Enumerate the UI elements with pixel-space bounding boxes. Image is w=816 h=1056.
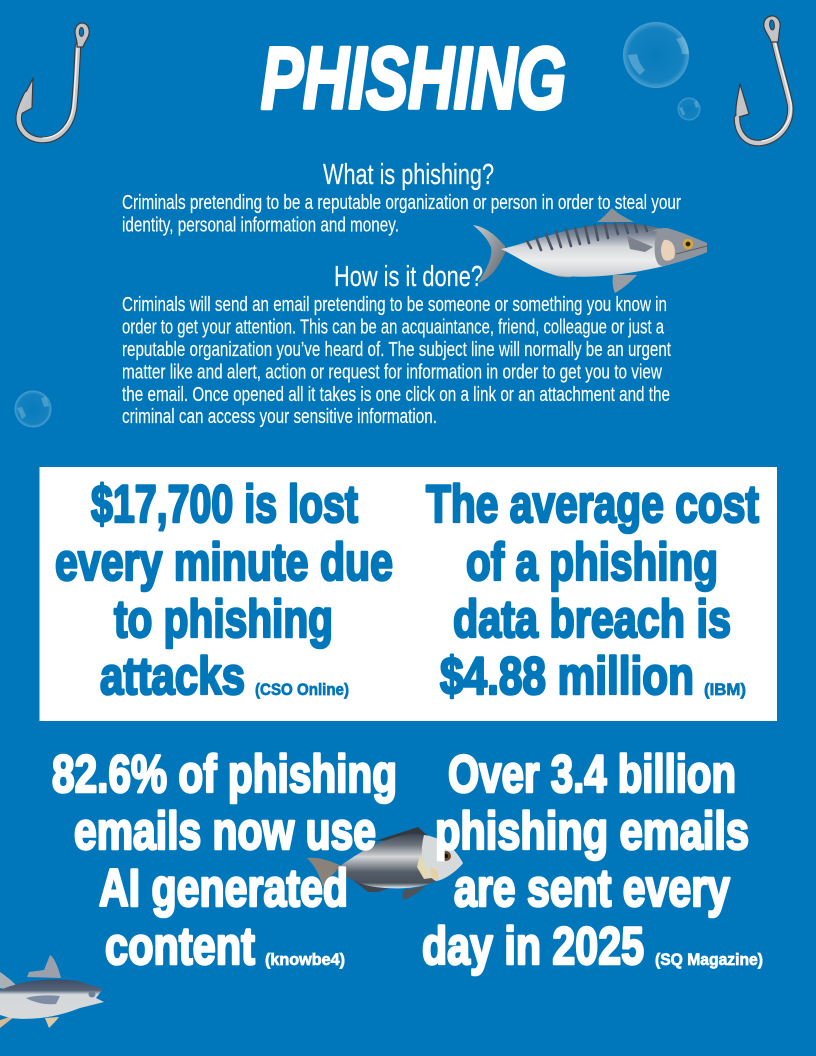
heading: what is phishing: What is phishing? [323,159,494,191]
stat: $17,700 lost per minute [55,475,393,706]
stat: AI generated phishing emails: content [105,917,255,976]
stat: AI generated phishing emails: 82.6% of phishing [52,745,397,804]
stat: AI generated phishing emails: emails now use [74,802,376,861]
stat: $17,700 lost per minute: (CSO Online) [255,681,349,699]
stat: average breach cost [426,475,759,706]
text block: definition [122,192,681,236]
heading: how is it done: How is it done? [334,261,483,293]
icon: bream fish [307,827,463,900]
stat: $17,700 lost per minute: every minute due [55,533,393,592]
text block: definition: identity, personal information and money. [122,214,399,236]
stat: daily phishing emails: day in 2025 [422,917,644,976]
stat: daily phishing emails: are sent every [454,859,730,918]
icon: tuna fish [0,955,104,1028]
stat: daily phishing emails [422,745,763,976]
icon: small bubble [678,98,700,120]
stat: $17,700 lost per minute: attacks [100,647,245,706]
stat: average breach cost: of a phishing [466,533,718,592]
stat: $17,700 lost per minute: to phishing [114,590,333,649]
stat: average breach cost: data breach is [453,590,731,649]
title: PHISHING [261,30,566,127]
stat: daily phishing emails: (SQ Magazine) [655,951,763,969]
icon: left bubble [14,390,52,428]
panel: white stats [40,467,777,721]
icon: fishing hook right [736,16,791,143]
icon: fishing hook left [17,23,89,140]
stat: AI generated phishing emails [52,745,397,976]
stat: average breach cost: (IBM) [704,681,746,699]
text block: explanation [122,294,671,428]
stat: $17,700 lost per minute: $17,700 is lost [91,475,358,534]
icon: large bubble [623,22,689,88]
stat: AI generated phishing emails: (knowbe4) [265,951,345,969]
stat: average breach cost: $4.88 million [440,647,694,706]
text block: explanation: criminal can access your sensitive information. [122,406,437,428]
icon: mackerel fish [473,208,707,293]
stat: AI generated phishing emails: AI generated [99,859,348,918]
text block: explanation: matter like and alert, action or request for information in order to get you to view [122,362,662,384]
